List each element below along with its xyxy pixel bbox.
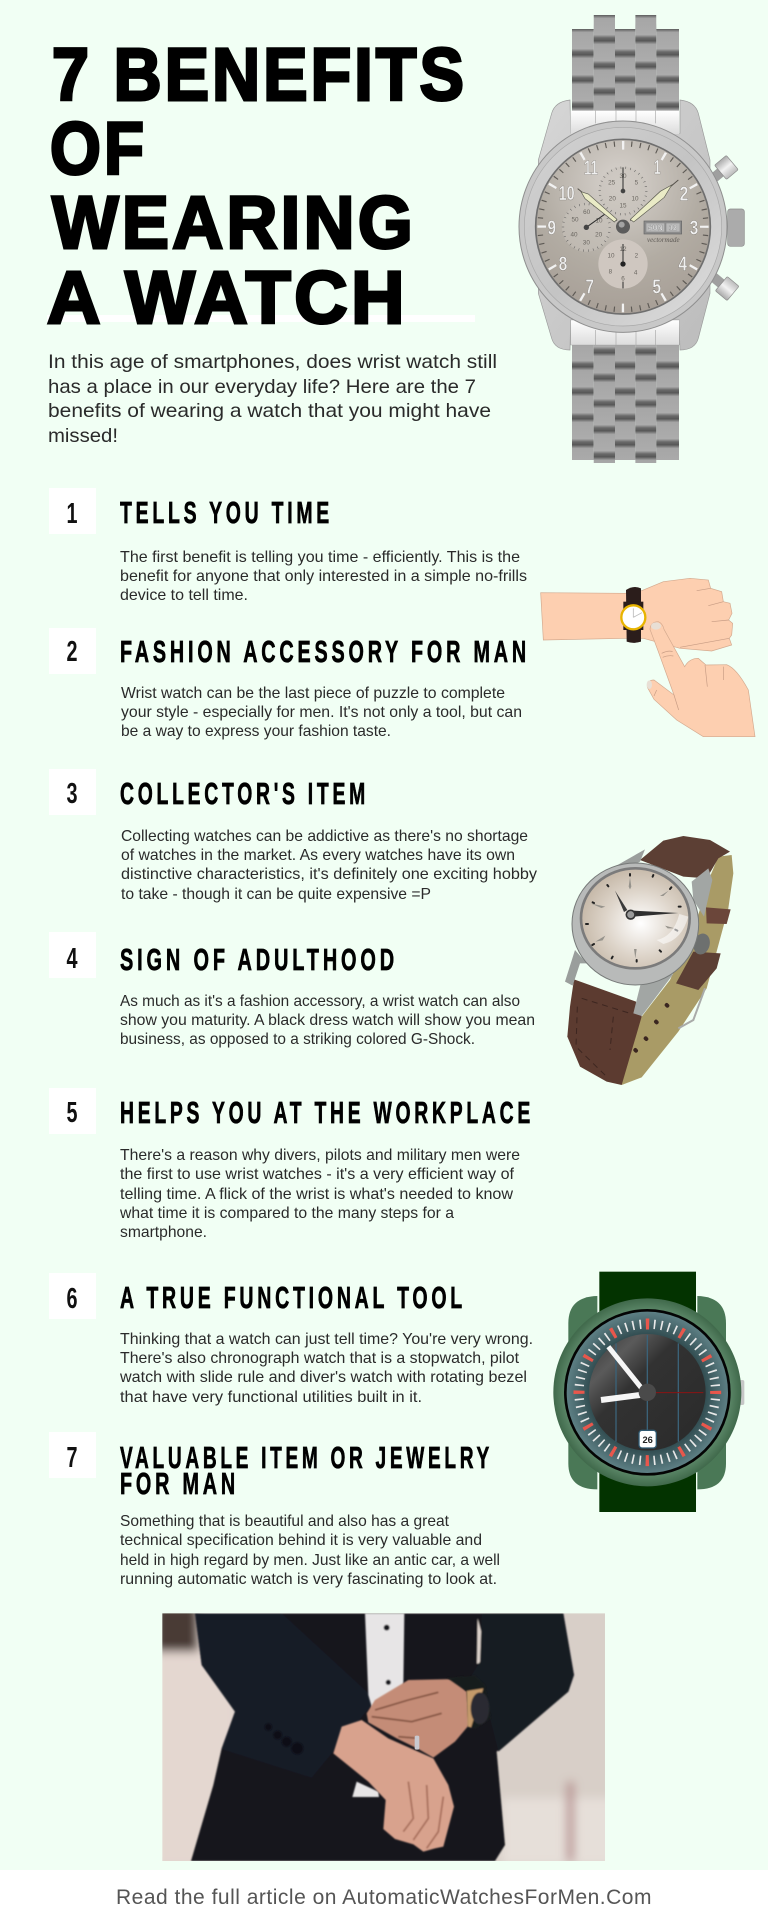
body text 3: of watches in the market. As every watches have its own: [121, 847, 515, 864]
body text 2: Wrist watch can be the last piece of puzzle to complete: [121, 685, 505, 702]
wrist watch: [621, 587, 645, 643]
illustration: hands checking wrist watch: [541, 578, 755, 737]
body text 5: There's a reason why divers, pilots and military men were: [120, 1147, 520, 1164]
sub dials: 30: [583, 240, 590, 247]
number badge 1: [49, 488, 96, 534]
body text 1: The first benefit is telling you time - efficiently. This is the: [120, 549, 520, 566]
strap upper, brown: [640, 836, 730, 878]
sub dials: 20: [595, 232, 603, 239]
number badge 1: 1: [66, 498, 78, 530]
body text 2: your style - especially for men. It's not only a tool, but can: [121, 704, 522, 721]
strap keepers: [676, 907, 731, 990]
heading 1: TELLS YOU TIME: [120, 495, 333, 530]
body text 4: show you maturity. A black dress watch will show you mean: [120, 1012, 535, 1029]
body text 4: business, as opposed to a striking colored G-Shock.: [120, 1031, 475, 1048]
hour numerals: 8: [559, 254, 567, 276]
hour numerals: 9: [547, 218, 556, 240]
title: 7 BENEFITS: [52, 33, 467, 116]
dial: [536, 139, 710, 314]
watch on upper wrist: [447, 1676, 491, 1729]
sub dials: 4: [634, 269, 638, 276]
number badge 7: 7: [66, 1442, 78, 1474]
number badge 5: 5: [66, 1097, 78, 1129]
white minute hand: [608, 1347, 642, 1388]
intro text: [48, 351, 497, 447]
day and date window: [644, 221, 682, 244]
footer text: Read the full article on AutomaticWatchesForMen.Com: [116, 1886, 652, 1909]
body text 6: Thinking that a watch can just tell time? You're very wrong.: [120, 1331, 533, 1348]
hour numerals: 3: [690, 218, 698, 240]
crown: [739, 1380, 744, 1405]
bezel: [519, 121, 727, 332]
sub dials: 30: [619, 173, 627, 180]
shirt placket: [352, 1613, 404, 1797]
body text 6: [119, 1331, 533, 1406]
hour numerals: 10: [559, 183, 575, 205]
intro text: missed!: [48, 425, 118, 447]
body text 1: benefit for anyone that only interested in a simple no-frills: [120, 568, 527, 585]
case body: [553, 1298, 741, 1486]
date window: 26: [642, 1435, 653, 1445]
body text 6: There's also chronograph watch that is a stopwatch, pilot: [120, 1350, 520, 1367]
body text 4: [120, 993, 535, 1048]
left sleeve: [195, 1613, 376, 1778]
sub dials: 25: [608, 179, 616, 186]
title: [47, 33, 475, 339]
heading 7: FOR MAN: [120, 1466, 239, 1501]
intro text: In this age of smartphones, does wrist watch still: [48, 351, 497, 373]
illustration: chronograph wrist watch: [519, 15, 744, 463]
hands: [615, 891, 678, 919]
body text 7: running automatic watch is very fascinating to look at.: [120, 1571, 497, 1588]
sub dials: 15: [619, 202, 627, 209]
minute ticks: [579, 1324, 716, 1461]
number badge 6: 6: [66, 1283, 78, 1315]
bracelet: [572, 15, 679, 463]
forearm and fist: [541, 578, 733, 651]
body text 6: that have very functional utilities built in it.: [120, 1389, 422, 1406]
strap lower, brown: [567, 979, 642, 1085]
heading 7: VALUABLE ITEM OR JEWELRY: [120, 1440, 493, 1475]
intro text: benefits of wearing a watch that you might have: [48, 400, 491, 422]
sub dials: 5: [635, 179, 639, 186]
footer band: [0, 1870, 768, 1920]
number badge 7: [49, 1432, 96, 1478]
body text 3: distinctive characteristics, it's definitely one exciting hobby: [121, 866, 537, 883]
body text 5: the first to use wrist watches - it's a very efficient way of: [120, 1166, 515, 1183]
sub dials: 2: [635, 252, 639, 259]
section 3: [49, 769, 537, 903]
section 5: [49, 1088, 534, 1241]
hour numerals: [547, 157, 698, 299]
watch hands: [578, 180, 678, 234]
heading 3: COLLECTOR'S ITEM: [120, 776, 369, 811]
body text 7: Something that is beautiful and also has a great: [120, 1513, 450, 1530]
blurred backdrop: [162, 1613, 605, 1861]
hour numerals: 5: [652, 277, 661, 299]
body text 3: to take - though it can be quite expensive =P: [121, 886, 431, 903]
end links: [571, 111, 679, 345]
body text 5: telling time. A flick of the wrist is what's needed to know: [120, 1186, 513, 1203]
number badge 6: [49, 1273, 96, 1319]
day and date window: vectormade: [647, 236, 680, 244]
hour numerals: 4: [678, 253, 687, 275]
body text 6: watch with slide rule and diver's watch with rotating bezel: [119, 1369, 527, 1386]
illustration: green diver watch: [553, 1272, 744, 1512]
sub dials: [562, 167, 648, 289]
body text 2: [121, 685, 522, 740]
heading 4: SIGN OF ADULTHOOD: [120, 942, 398, 977]
dial: [581, 868, 690, 968]
jacket body: [191, 1613, 574, 1861]
date window: [639, 1430, 656, 1448]
sub dials: 6: [621, 276, 625, 283]
body text 5: smartphone.: [120, 1224, 207, 1241]
sub dials: 10: [595, 218, 603, 225]
body text 5: [119, 1147, 520, 1241]
sub dials: 8: [609, 268, 613, 275]
day and date window: SUN: [648, 225, 663, 232]
sub dials: 12: [619, 246, 627, 253]
right sleeve: [472, 1613, 574, 1752]
hour numerals: 1: [654, 157, 661, 179]
body text 7: [120, 1513, 500, 1588]
pushers and crown: [707, 155, 744, 301]
hour numerals: 7: [585, 277, 594, 299]
hub: [639, 1384, 656, 1401]
hour numerals: 11: [584, 158, 598, 180]
day and date window: 12: [669, 225, 677, 232]
nails and knuckles: [647, 622, 723, 710]
body text 3: [121, 828, 537, 903]
case and bezel: [572, 863, 699, 985]
black ring and bezel: [564, 1309, 731, 1476]
section 7: [49, 1432, 500, 1588]
section 4: [49, 932, 535, 1048]
number badge 2: [49, 628, 96, 674]
number badge 3: [49, 769, 96, 815]
intro text: has a place in our everyday life? Here are the 7: [48, 376, 476, 398]
body text 1: [120, 549, 527, 604]
section 1: [49, 488, 527, 604]
title: A WATCH: [47, 256, 408, 339]
seconds hand: [655, 1391, 703, 1394]
crown: [691, 932, 712, 956]
body text 1: device to tell time.: [120, 587, 248, 604]
number badge 4: 4: [66, 943, 78, 975]
sub dials: 20: [609, 195, 616, 202]
fist finger lines: [680, 588, 729, 647]
body text 2: be a way to express your fashion taste.: [121, 723, 391, 740]
body text 7: technical specification behind it is very valuable and: [120, 1532, 482, 1549]
pointing hand: [647, 622, 755, 737]
heading 5: HELPS YOU AT THE WORKPLACE: [120, 1095, 534, 1130]
watch case and lugs: [538, 100, 710, 350]
hour numerals: 2: [680, 184, 688, 206]
body text 4: As much as it's a fashion accessory, a wrist watch can also: [120, 993, 520, 1010]
section 6: [49, 1273, 533, 1406]
number badge 4: [49, 932, 96, 978]
number badge 2: 2: [66, 636, 78, 668]
sub dials: 60: [583, 209, 591, 216]
sub dials: 40: [570, 232, 578, 239]
number badge 3: 3: [66, 778, 78, 810]
white hour hand: [601, 1395, 640, 1400]
buckle: [678, 988, 705, 1028]
upper hand: [367, 1679, 469, 1758]
title: OF: [50, 107, 147, 190]
slide rule lines: [616, 1335, 678, 1442]
heading 6: A TRUE FUNCTIONAL TOOL: [120, 1280, 466, 1315]
body text 5: what time it is compared to the many steps for a: [119, 1205, 454, 1222]
photo: man in suit adjusting cuff: [162, 1613, 605, 1861]
lower wrist and hand: [333, 1720, 454, 1852]
number badge 5: [49, 1088, 96, 1134]
heading 7: [120, 1440, 493, 1501]
stitching and holes: [576, 998, 667, 1077]
title: WEARING: [52, 181, 416, 264]
illustration: leather strap watch: [565, 836, 733, 1085]
strap back, tan underside: [622, 855, 733, 1085]
inner dial: [589, 1334, 706, 1451]
sub dials: 10: [607, 253, 615, 260]
body text 7: held in high regard by men. Just like an antic car, a well: [120, 1552, 500, 1569]
sub dials: 50: [571, 217, 579, 224]
section 2: [49, 628, 530, 740]
sleeve buttons: [265, 1723, 303, 1754]
wedding ring: [415, 1736, 419, 1750]
heading 2: FASHION ACCESSORY FOR MAN: [120, 634, 530, 669]
sub dials: 10: [631, 195, 639, 202]
case lugs: [568, 1296, 726, 1489]
lugs: [565, 849, 712, 1016]
body text 3: Collecting watches can be addictive as there's no shortage: [121, 828, 528, 845]
strap: [599, 1272, 696, 1512]
